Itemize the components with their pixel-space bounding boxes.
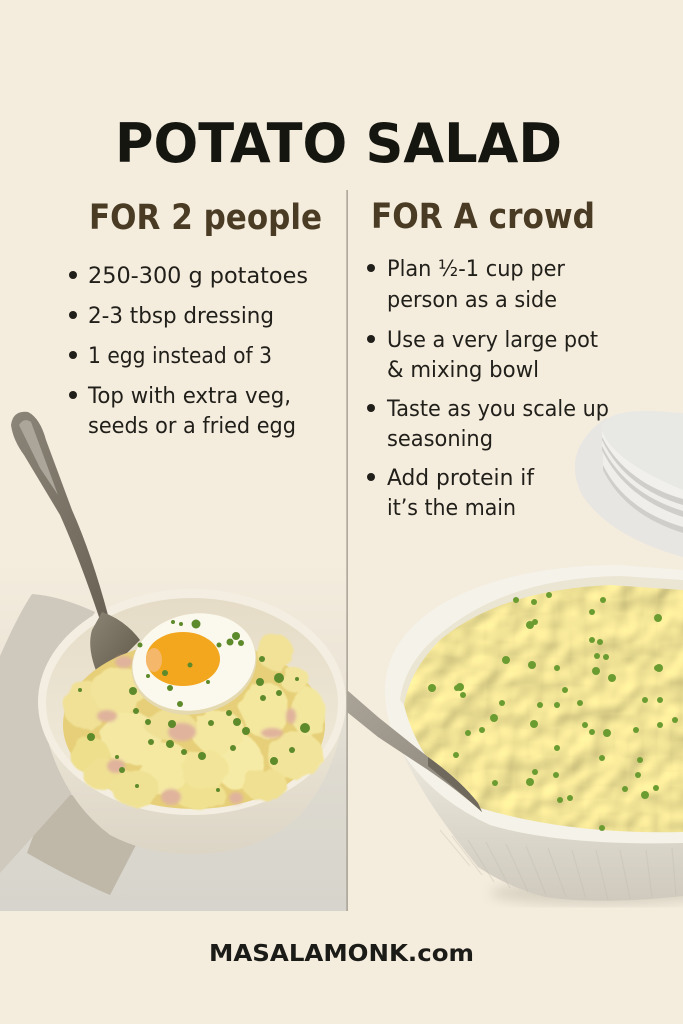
napkin: [0, 594, 137, 895]
soft shadow: [490, 881, 683, 905]
heading: for a crowd: FOR A crowd: [371, 197, 595, 237]
bullet list: for 2 people: 250-300 g potatoes: [88, 264, 308, 289]
bowl: [38, 589, 346, 854]
bullet list: for 2 people: seeds or a fried egg: [88, 414, 296, 439]
photo: stacked white plates: [575, 411, 683, 557]
bullet list: for a crowd: Plan ½-1 cup per: [387, 257, 566, 282]
table surface: [0, 673, 346, 911]
serving spoon: [347, 690, 482, 812]
bowl rim: [385, 565, 683, 843]
bullet list: for a crowd: it’s the main: [387, 496, 516, 521]
footer: website: MASALAMONK.com: [209, 941, 474, 967]
bowl ribs: [440, 830, 676, 900]
heading: for 2 people: FOR 2 people: [89, 198, 322, 238]
bullet list: for 2 people: [69, 264, 308, 439]
spoon: [11, 412, 140, 680]
potato salad: [63, 634, 325, 809]
bowl body: [395, 735, 683, 901]
panel: for 2 people text: [69, 198, 322, 439]
bullet list: for a crowd: Add protein if: [387, 466, 535, 491]
photo: large bowl of potato salad: [347, 565, 683, 905]
divider line: [346, 190, 348, 911]
panel: for a crowd text: [367, 197, 609, 521]
bowl inner wall: [400, 576, 683, 825]
bullet list: for a crowd: [367, 257, 609, 521]
bullet list: for a crowd: Use a very large pot: [387, 328, 598, 353]
mashed salad: [404, 585, 683, 832]
bullet list: for 2 people: Top with extra veg,: [87, 384, 291, 409]
parsley on small bowl: [78, 620, 310, 792]
bullet list: for a crowd: seasoning: [387, 427, 493, 452]
bullet list: for a crowd: & mixing bowl: [387, 358, 539, 383]
photo: small bowl of potato salad with egg: [0, 412, 346, 911]
egg yolk: [146, 632, 220, 686]
bullet list: for 2 people: 2-3 tbsp dressing: [88, 304, 274, 329]
bullet list: for 2 people: 1 egg instead of 3: [88, 344, 272, 369]
chives on large bowl: [428, 592, 678, 831]
fried egg: [122, 602, 266, 726]
title: POTATO SALAD: [115, 112, 562, 175]
bullet list: for a crowd: person as a side: [387, 288, 557, 313]
bullet list: for a crowd: Taste as you scale up: [386, 397, 609, 422]
ham pieces: [97, 656, 296, 805]
